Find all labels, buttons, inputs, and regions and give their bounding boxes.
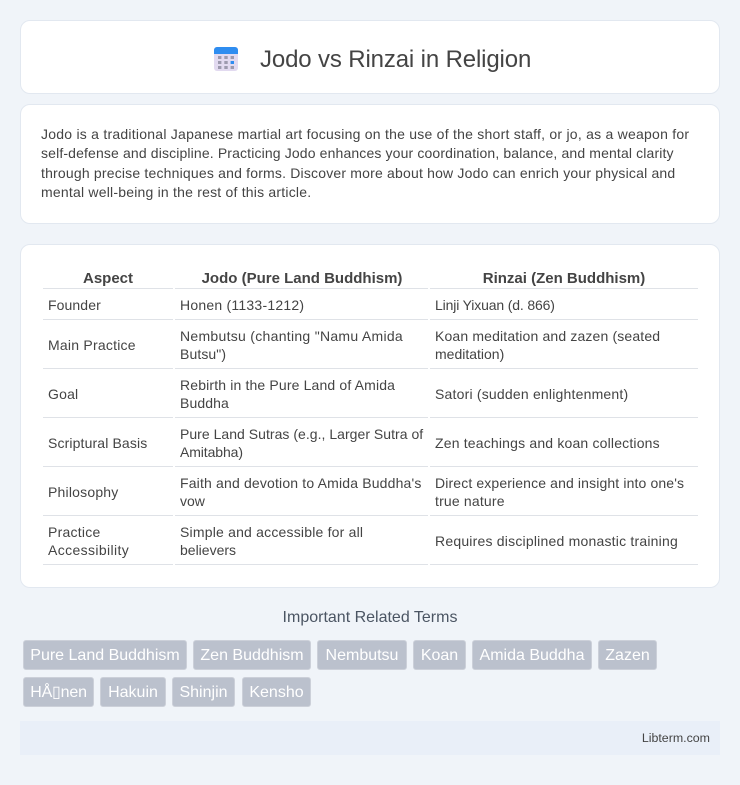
comparison table xyxy=(43,270,698,565)
row: main practice: Butsu") xyxy=(180,346,226,362)
intro text: Jodo is a traditional Japanese martial art focusing on the use of the short staff, or jo, as a weapon for xyxy=(41,126,689,142)
tag: Amida Buddha xyxy=(480,647,584,664)
tag xyxy=(598,640,657,670)
tag xyxy=(242,677,311,707)
row: philosophy: true nature xyxy=(435,493,505,509)
tag xyxy=(23,677,94,707)
tag: Nembutsu xyxy=(326,647,398,664)
related term tags xyxy=(23,640,657,707)
tag xyxy=(472,640,592,670)
row: founder: Honen (1133-1212) xyxy=(180,297,304,313)
row: scriptural basis xyxy=(48,426,660,460)
header card xyxy=(20,20,720,94)
row: practice accessibility: Requires disciplined monastic training xyxy=(435,533,678,549)
row: founder: Linji Yixuan (d. 866) xyxy=(435,297,555,313)
row: practice accessibility: Practice xyxy=(48,524,101,540)
footer source: Libterm.com xyxy=(642,731,710,745)
table header: Aspect xyxy=(83,270,133,287)
row: main practice: meditation) xyxy=(435,346,504,362)
row: goal: Goal xyxy=(48,386,78,402)
table header xyxy=(83,270,645,287)
tag: Koan xyxy=(421,647,458,664)
row: goal xyxy=(48,377,628,411)
intro text xyxy=(41,126,689,200)
tag: Pure Land Buddhism xyxy=(30,647,180,664)
row: founder: Founder xyxy=(48,297,101,313)
row: scriptural basis: Amitabha) xyxy=(180,444,243,460)
row: scriptural basis: Zen teachings and koan collections xyxy=(435,435,660,451)
row: goal: Rebirth in the Pure Land of Amida xyxy=(180,377,395,393)
row: philosophy xyxy=(48,475,684,509)
footer xyxy=(20,721,720,755)
tag: Kensho xyxy=(249,684,304,701)
title: Jodo vs Rinzai in Religion xyxy=(260,46,531,73)
tag: Zazen xyxy=(605,647,650,664)
row: philosophy: vow xyxy=(180,493,205,509)
row: philosophy: Faith and devotion to Amida Buddha's xyxy=(180,475,422,491)
row: main practice xyxy=(48,328,660,362)
intro text: through precise techniques and forms. Discover more about how Jodo can enrich your physical and xyxy=(41,165,675,181)
related terms heading: Important Related Terms xyxy=(283,609,457,626)
tag xyxy=(23,640,187,670)
icon: calendar xyxy=(214,47,238,71)
tag xyxy=(413,640,466,670)
tag xyxy=(317,640,407,670)
tag xyxy=(100,677,166,707)
row: scriptural basis: Pure Land Sutras (e.g., Larger Sutra of xyxy=(180,426,423,442)
tag: Hakuin xyxy=(108,684,158,701)
tag xyxy=(193,640,311,670)
table header: Rinzai (Zen Buddhism) xyxy=(483,270,645,287)
row: main practice: Nembutsu (chanting "Namu Amida xyxy=(180,328,403,344)
tag: Shinjin xyxy=(179,684,228,701)
row: practice accessibility: Accessibility xyxy=(48,542,129,558)
tag: HÅ▯nen xyxy=(30,684,87,701)
row: practice accessibility: Simple and accessible for all xyxy=(180,524,363,540)
tag xyxy=(172,677,235,707)
row: philosophy: Direct experience and insight into one's xyxy=(435,475,684,491)
row: scriptural basis: Scriptural Basis xyxy=(48,435,147,451)
intro text: self-defense and discipline. Practicing Jodo enhances your coordination, balance, and mental clarity xyxy=(41,145,674,161)
tag: Zen Buddhism xyxy=(200,647,304,664)
row: practice accessibility: believers xyxy=(180,542,236,558)
row: practice accessibility xyxy=(48,524,678,558)
intro card xyxy=(20,104,720,224)
row: goal: Buddha xyxy=(180,395,229,411)
row: goal: Satori (sudden enlightenment) xyxy=(435,386,628,402)
intro text: mental well-being in the rest of this article. xyxy=(41,184,311,200)
table header: Jodo (Pure Land Buddhism) xyxy=(202,270,402,287)
table card xyxy=(20,244,720,588)
row: philosophy: Philosophy xyxy=(48,484,118,500)
row: main practice: Main Practice xyxy=(48,337,136,353)
row: main practice: Koan meditation and zazen (seated xyxy=(435,328,660,344)
row: founder xyxy=(48,297,555,313)
